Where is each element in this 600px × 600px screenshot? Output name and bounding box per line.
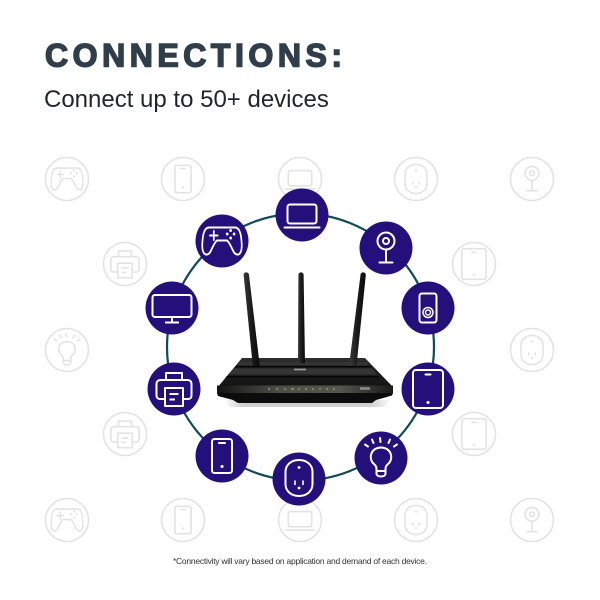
device icon: camera (360, 222, 412, 274)
device icon: printer (148, 362, 200, 416)
subtitle: Connect up to 50+ devices (44, 86, 329, 113)
router logo (294, 368, 306, 370)
ghost icon: game controller (46, 498, 88, 542)
router front badge (360, 387, 370, 390)
ghost icon: printer (104, 242, 146, 286)
router shadow (223, 400, 391, 407)
router status LEDs (268, 388, 335, 390)
device icon: phone (196, 430, 248, 482)
footnote: *Connectivity will vary based on application and demand of each device. (173, 556, 427, 566)
ghost icon: phone (162, 158, 204, 200)
router body (217, 358, 393, 394)
ghost icon: smart plug (394, 158, 438, 200)
ghost icon: tablet (452, 242, 496, 286)
connection ring (167, 214, 434, 480)
ghost icon: laptop (278, 158, 322, 200)
ghost icon: phone (162, 498, 204, 542)
ghost icon: laptop (278, 498, 322, 542)
device icon: light bulb (354, 432, 408, 484)
background ghost device icons (46, 158, 554, 542)
router front strip (217, 386, 393, 394)
ghost icon: smart plug (510, 328, 554, 372)
title: CONNECTIONS: (45, 38, 342, 74)
ghost icon: tablet (452, 412, 496, 456)
ghost icon: printer (104, 412, 146, 456)
device icon: laptop (276, 188, 328, 242)
ghost icon: smart plug (394, 498, 438, 542)
device icon: doorbell (402, 282, 454, 334)
device icon: monitor (146, 282, 198, 334)
router (217, 272, 393, 407)
ghost icon: camera (510, 498, 554, 542)
ghost icon: game controller (46, 158, 88, 200)
ghost icon: light bulb (46, 328, 88, 372)
device icon: game controller (196, 214, 248, 268)
router top panel highlights (228, 362, 377, 374)
ghost icon: camera (510, 158, 554, 200)
device icon: tablet (402, 362, 454, 416)
device icon: smart plug (272, 452, 326, 506)
router antennas (244, 272, 366, 366)
